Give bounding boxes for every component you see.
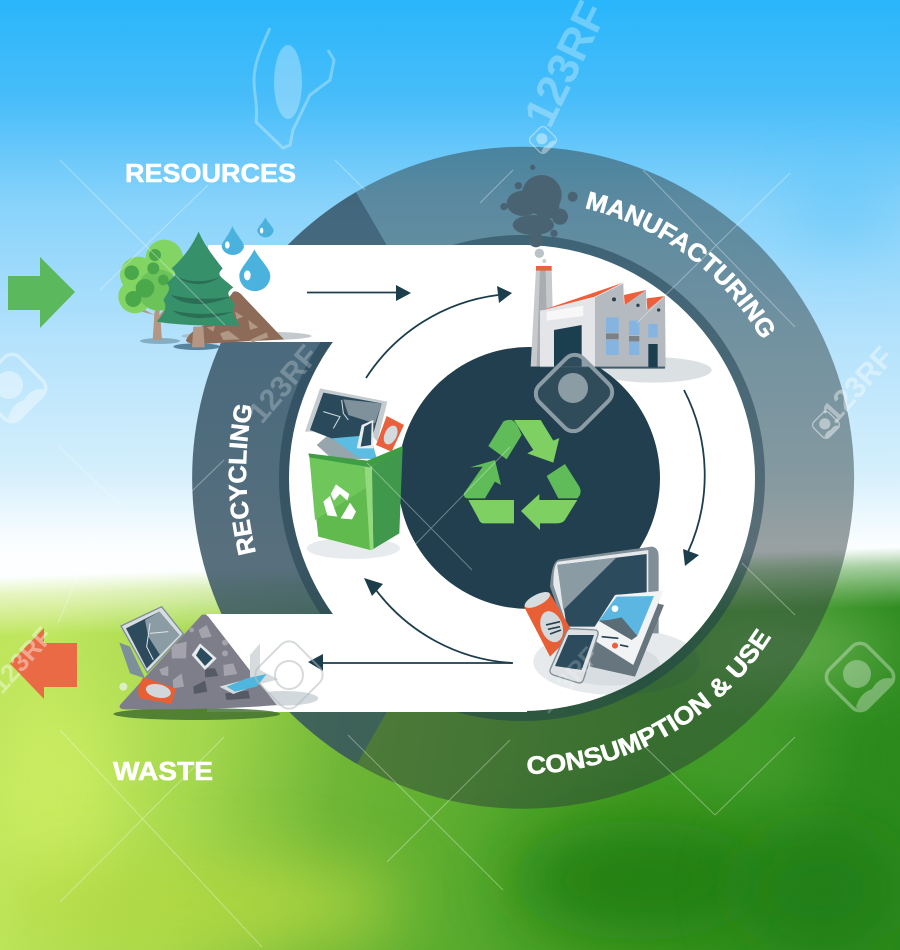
faint camera watermark on the white band: [251, 637, 327, 713]
broken tablet: [305, 388, 387, 442]
can: [522, 589, 573, 657]
icon: consumer devices: [522, 547, 700, 695]
crushed can: [138, 677, 176, 704]
magazine: [588, 591, 664, 677]
deciduous tree: [118, 240, 183, 340]
broken tablet: [119, 607, 183, 678]
label: recycling: RECYCLING: [228, 404, 256, 556]
arrow: consumption to recycling: [364, 578, 512, 663]
phone: [192, 643, 217, 670]
white cycle band: [207, 245, 755, 712]
arrow: manufacturing to consumption: [683, 390, 705, 566]
label: manufacturing: MANUFACTURING: [586, 191, 774, 338]
monitor: [550, 547, 659, 633]
bin recycle mark: [323, 484, 356, 519]
label: consumption and use: CONSUMPTION & USE: [527, 628, 772, 774]
arrow: resources input: [8, 257, 75, 328]
icon: recycling bin with discarded items: [305, 388, 404, 559]
building: [595, 283, 666, 367]
dark centre disc: [398, 347, 660, 609]
arrow: resources to manufacturing straight: [307, 285, 411, 301]
label: waste: WASTE: [113, 756, 213, 786]
water drops: [222, 217, 274, 291]
label: resources: RESOURCES: [125, 158, 296, 188]
soil pile: [186, 291, 284, 344]
arrow: waste output: [10, 628, 77, 699]
watermarks: 123RF logos and crop lines: 123RF: [242, 339, 325, 429]
crumpled magazine: [219, 643, 278, 694]
bin body: [309, 456, 370, 550]
smoke: [500, 165, 578, 263]
icon: resources trees and soil: [118, 217, 312, 350]
icon: waste pile: [113, 607, 318, 720]
watermarks: 123RF logos and crop lines: 123RF: [816, 341, 900, 430]
arrow: recycling to manufacturing: [366, 286, 512, 378]
watermarks: 123RF logos and crop lines: 123RF: [530, 641, 605, 719]
arrow: consumption to waste: [308, 654, 513, 671]
chimney: [531, 268, 554, 367]
icon: recycling symbol: [464, 420, 581, 530]
icon: factory with smoke: [500, 165, 712, 383]
phone: [550, 629, 598, 683]
can: [376, 416, 404, 452]
outer cycle ring: [192, 147, 854, 809]
pine tree: [157, 232, 241, 347]
dark-disc camera watermark: [531, 350, 617, 436]
